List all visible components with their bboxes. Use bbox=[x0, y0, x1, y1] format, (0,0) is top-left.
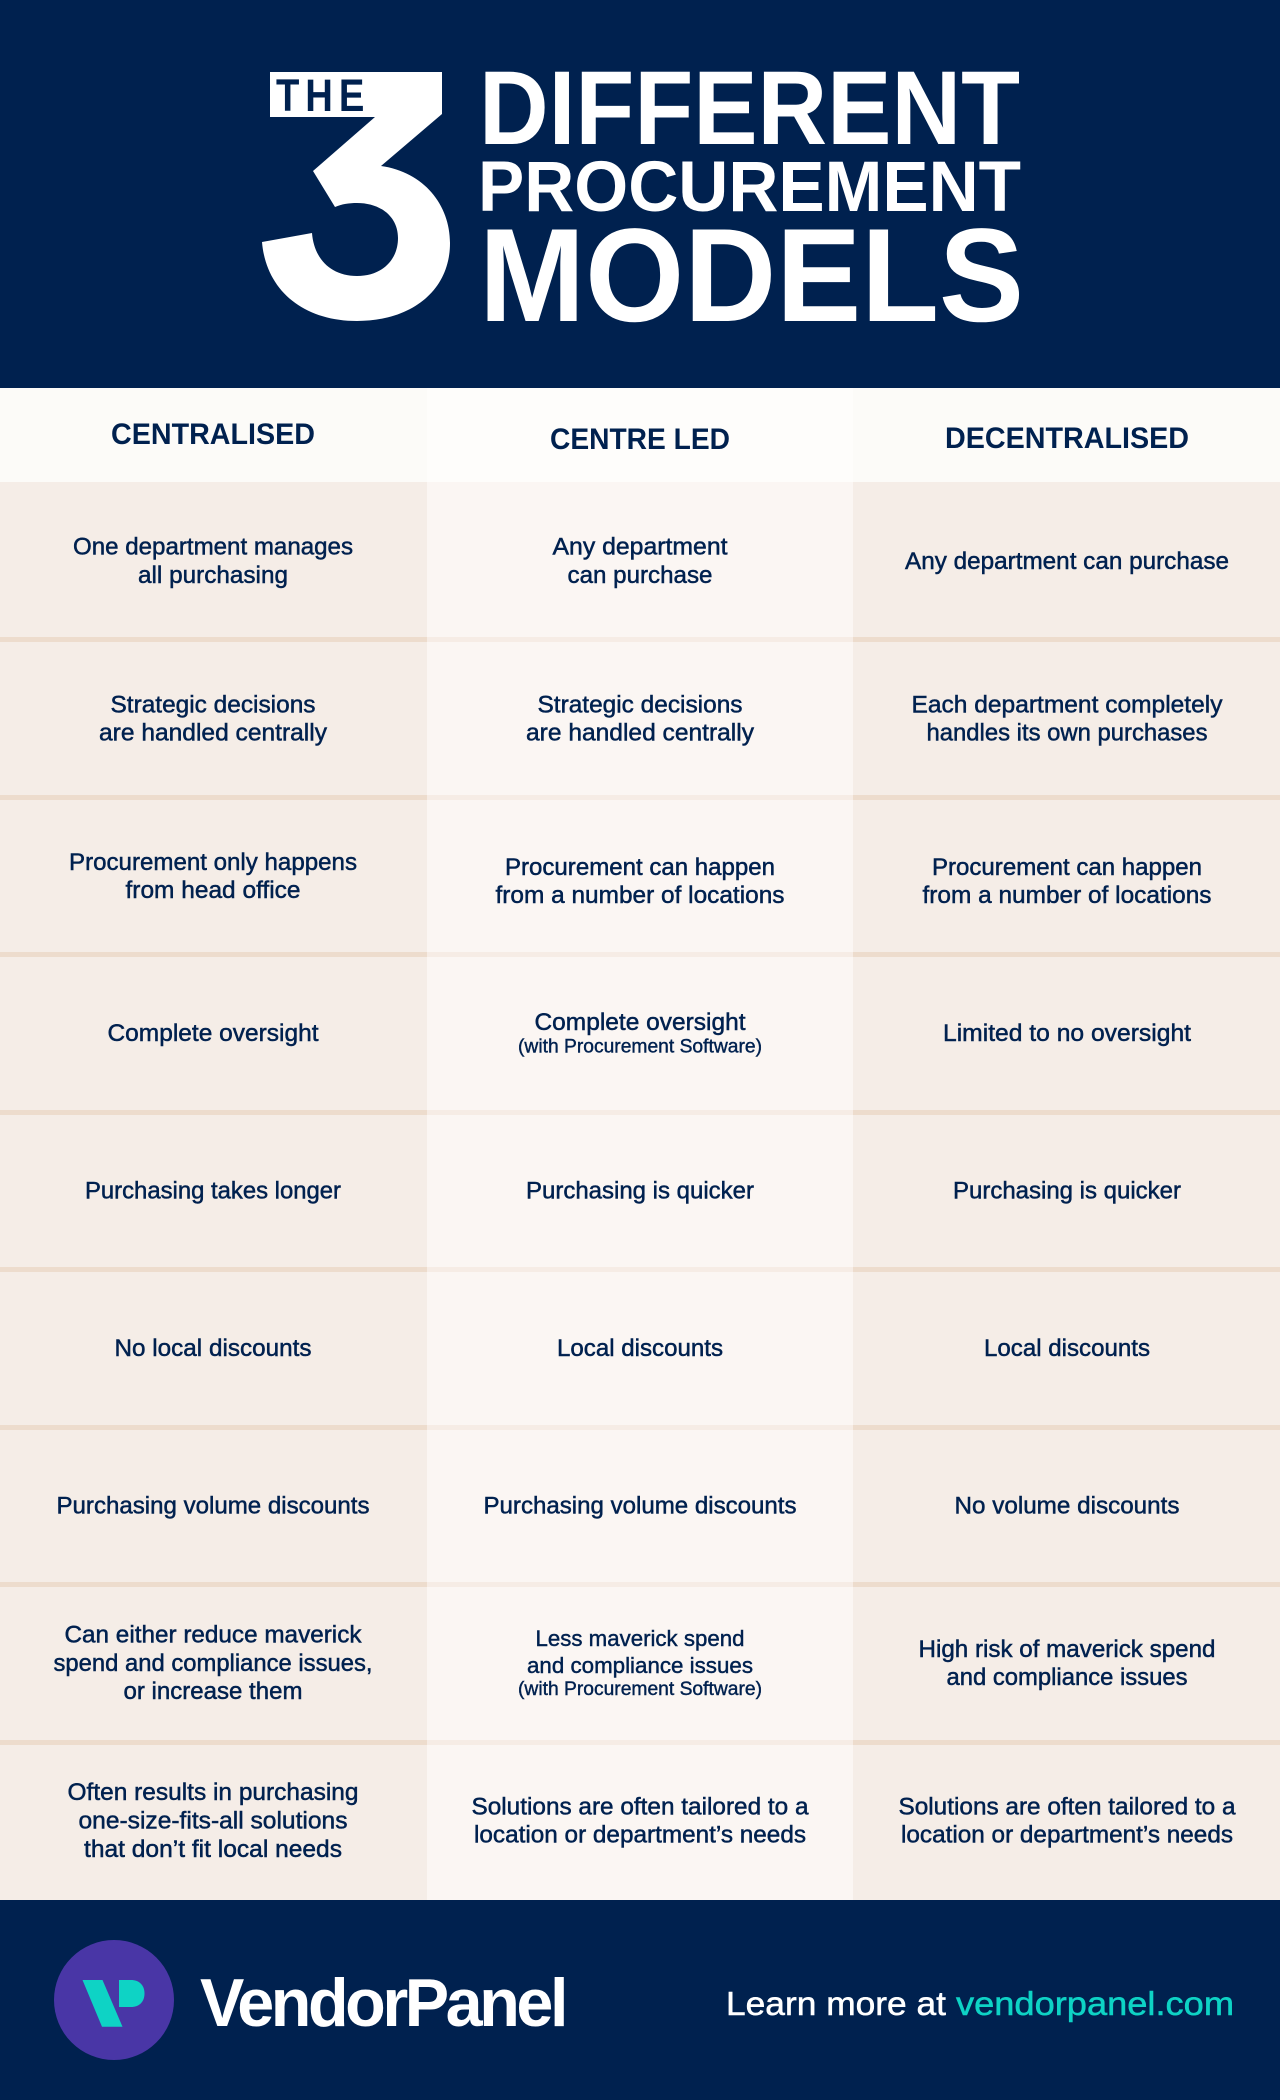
cell: decentralised: from a number of locations bbox=[922, 882, 1212, 909]
cell: decentralised: Any department can purchase bbox=[905, 548, 1229, 575]
cell: centre led: are handled centrally bbox=[526, 720, 755, 746]
cell: centralised: Procurement only happens bbox=[69, 849, 357, 876]
cell: centre led: Purchasing is quicker bbox=[526, 1178, 754, 1204]
cell: centralised: Purchasing volume discounts bbox=[56, 1492, 370, 1520]
cell: centralised: Can either reduce maverick bbox=[64, 1622, 362, 1649]
cell: decentralised: High risk of maverick spend bbox=[918, 1636, 1216, 1663]
cell: centralised bbox=[73, 534, 353, 589]
cell: centre led bbox=[526, 692, 755, 746]
cell: centralised: Strategic decisions bbox=[110, 692, 316, 718]
cell: centre led: Complete oversight bbox=[534, 1009, 746, 1036]
call to action: vendorpanel.com bbox=[956, 1985, 1234, 2022]
cell: centralised: one-size-fits-all solutions bbox=[78, 1808, 348, 1834]
row: oversight bbox=[108, 1009, 1191, 1058]
panel: title banner bbox=[0, 0, 1280, 388]
cell: centralised: No local discounts bbox=[114, 1335, 312, 1362]
cell: centralised: Often results in purchasing bbox=[68, 1779, 358, 1806]
cell: decentralised: Each department completely bbox=[912, 692, 1223, 718]
row: who can purchase bbox=[73, 534, 1229, 589]
cell: centralised bbox=[54, 1622, 372, 1705]
cell: centre led bbox=[518, 1009, 762, 1058]
big numeral 3 with THE label: THE bbox=[276, 70, 370, 121]
cell: decentralised bbox=[922, 854, 1212, 909]
cell: decentralised: Local discounts bbox=[984, 1335, 1150, 1362]
cell: decentralised: No volume discounts bbox=[954, 1492, 1180, 1520]
cell: centralised: all purchasing bbox=[138, 562, 288, 589]
cell: decentralised: location or department’s needs bbox=[901, 1822, 1233, 1848]
row: local discounts bbox=[114, 1335, 1150, 1362]
row: volume discounts bbox=[56, 1492, 1180, 1520]
cell: decentralised: Procurement can happen bbox=[932, 854, 1202, 881]
cell: decentralised: Purchasing is quicker bbox=[953, 1178, 1181, 1204]
row: solution fit bbox=[68, 1779, 1236, 1863]
cell: centre led: Any department bbox=[552, 534, 728, 560]
big numeral 3 with THE label bbox=[262, 70, 450, 321]
cell: centre led bbox=[552, 534, 728, 589]
cell: decentralised: Solutions are often tailored to a bbox=[898, 1794, 1236, 1820]
icon: VendorPanel logo mark bbox=[54, 1940, 174, 2060]
cell: centralised bbox=[99, 692, 328, 746]
panel: column backgrounds bbox=[0, 388, 1280, 1900]
cell: centralised: spend and compliance issues, bbox=[54, 1650, 372, 1677]
cell: decentralised: and compliance issues bbox=[946, 1664, 1188, 1691]
logo wordmark: VendorPanel bbox=[200, 1965, 565, 2041]
cell: centralised bbox=[69, 849, 357, 904]
cell: centralised: One department manages bbox=[73, 534, 353, 560]
cell: centre led: (with Procurement Software) bbox=[518, 1679, 762, 1700]
cell: centralised: are handled centrally bbox=[99, 720, 328, 746]
cell: decentralised: Limited to no oversight bbox=[943, 1020, 1191, 1047]
cell: centre led: Strategic decisions bbox=[538, 692, 742, 718]
cell: decentralised bbox=[912, 692, 1223, 746]
cell: centralised: from head office bbox=[126, 877, 300, 904]
cell: centre led: and compliance issues bbox=[527, 1653, 753, 1678]
cell: centre led: can purchase bbox=[568, 562, 712, 589]
cell: centralised: that don’t fit local needs bbox=[84, 1836, 342, 1863]
title: DIFFERENT: DIFFERENT bbox=[479, 50, 1020, 167]
cell: centralised: Purchasing takes longer bbox=[85, 1178, 341, 1204]
cell: centre led bbox=[472, 1794, 809, 1848]
panel: footer bbox=[0, 1900, 1280, 2100]
row: strategic decisions bbox=[99, 692, 1223, 746]
row: maverick spend bbox=[54, 1622, 1216, 1705]
heading: Decentralised: DECENTRALISED bbox=[945, 422, 1189, 455]
call to action bbox=[726, 1985, 1234, 2022]
cell: centre led: Less maverick spend bbox=[536, 1626, 744, 1651]
cell: centre led: (with Procurement Software) bbox=[518, 1036, 762, 1058]
cell: centre led: Solutions are often tailored to a bbox=[472, 1794, 809, 1820]
cell: decentralised: handles its own purchases bbox=[926, 720, 1208, 746]
column headings bbox=[111, 418, 1189, 456]
title: MODELS: MODELS bbox=[479, 202, 1024, 350]
cell: centralised bbox=[68, 1779, 358, 1863]
row: procurement location bbox=[69, 849, 1212, 909]
cell: centralised: or increase them bbox=[124, 1678, 302, 1705]
cell: centre led: location or department’s needs bbox=[474, 1822, 806, 1848]
cell: decentralised bbox=[918, 1636, 1216, 1691]
cell: centre led: Local discounts bbox=[557, 1335, 723, 1362]
cell: centre led bbox=[496, 854, 784, 909]
cell: decentralised bbox=[898, 1794, 1236, 1848]
row: purchasing speed bbox=[85, 1178, 1181, 1204]
title: PROCUREMENT: PROCUREMENT bbox=[478, 148, 1021, 227]
cell: centralised: Complete oversight bbox=[108, 1020, 319, 1047]
cell: centre led bbox=[518, 1626, 762, 1700]
heading: Centre led: CENTRE LED bbox=[550, 423, 730, 456]
cell: centre led: Purchasing volume discounts bbox=[484, 1492, 796, 1520]
call to action: Learn more at bbox=[726, 1985, 946, 2022]
cell: centre led: from a number of locations bbox=[496, 882, 784, 909]
heading: Centralised: CENTRALISED bbox=[111, 418, 315, 451]
cell: centre led: Procurement can happen bbox=[505, 854, 775, 881]
